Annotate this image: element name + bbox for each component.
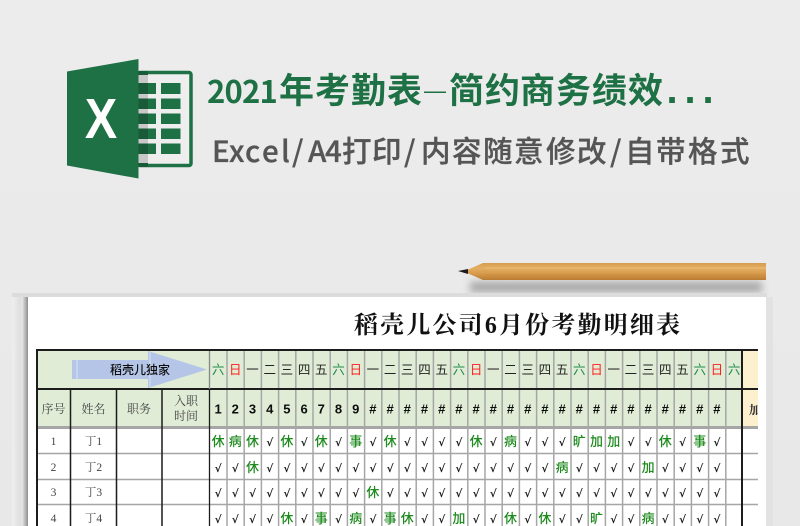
attendance marks: √√√√√√√√√√√√√√√√√√√√√√√√√√√√√ bbox=[215, 488, 721, 500]
back paper sheets bbox=[12, 293, 773, 526]
row labels: 2 bbox=[51, 462, 57, 474]
column headers: 时间 bbox=[174, 408, 198, 423]
weekday row: 日日日日日 bbox=[229, 363, 723, 377]
column headers bbox=[41, 394, 761, 423]
column headers: 序号 bbox=[41, 401, 66, 416]
column headers: 入职 bbox=[174, 394, 199, 408]
attendance marks: 休病加 bbox=[246, 460, 655, 475]
attendance marks: √√√√√√√√√√√√√√√√√√√√ bbox=[215, 514, 721, 526]
table header fills bbox=[37, 351, 758, 427]
column headers: 姓名 bbox=[81, 401, 106, 416]
title: 2021 bbox=[207, 67, 278, 112]
arrow banner: 稻壳儿独家 bbox=[110, 362, 170, 377]
attendance marks: 休事病事休加休休旷病 bbox=[280, 511, 655, 526]
panel: attendance table bbox=[36, 349, 761, 526]
attendance marks: √√√√√√√√√√√√√√√√ bbox=[266, 437, 721, 449]
row labels: 丁3 bbox=[85, 486, 102, 499]
icon: pencil bbox=[458, 263, 766, 280]
row labels: 丁4 bbox=[85, 512, 102, 525]
row labels bbox=[51, 435, 102, 525]
table grid lines bbox=[36, 349, 758, 526]
weekday row: 六六六六六六 bbox=[212, 363, 740, 377]
attendance marks: √√√√√√√√√√√√√√√√√√√√√√√√√√√ bbox=[215, 463, 721, 475]
row labels: 1 bbox=[51, 436, 57, 448]
column headers: 加 bbox=[749, 402, 761, 417]
right paper margin bbox=[758, 350, 766, 526]
subtitle: Excel/A4打印/内容随意修改/自带格式 bbox=[212, 129, 750, 171]
column headers: 职务 bbox=[127, 402, 151, 416]
icon: Excel logo bbox=[67, 59, 191, 178]
pencil shadow bbox=[470, 282, 762, 292]
title: 简约商务绩效 bbox=[449, 72, 663, 111]
title: — bbox=[424, 78, 446, 103]
day number row: 123456789##################### bbox=[214, 402, 721, 416]
attendance marks: 休 bbox=[366, 485, 379, 500]
title: 年考勤表 bbox=[279, 72, 422, 111]
attendance marks bbox=[212, 434, 721, 526]
row labels: 3 bbox=[51, 487, 57, 499]
row labels: 丁2 bbox=[85, 461, 102, 474]
weekday row: 一二三四五一二三四五一二三四五一二三四五 bbox=[246, 363, 689, 377]
arrow banner bbox=[72, 351, 207, 388]
title: ... bbox=[666, 68, 714, 112]
row labels: 4 bbox=[51, 513, 57, 525]
attendance marks: 休病休休休事休休病旷加加休事 bbox=[212, 434, 706, 449]
row labels: 丁1 bbox=[85, 435, 102, 448]
icon: Excel logo: X bbox=[85, 87, 117, 151]
panel: paper sheet bbox=[28, 297, 766, 526]
sheet heading: 稻壳儿公司6月份考勤明细表 bbox=[354, 312, 680, 339]
